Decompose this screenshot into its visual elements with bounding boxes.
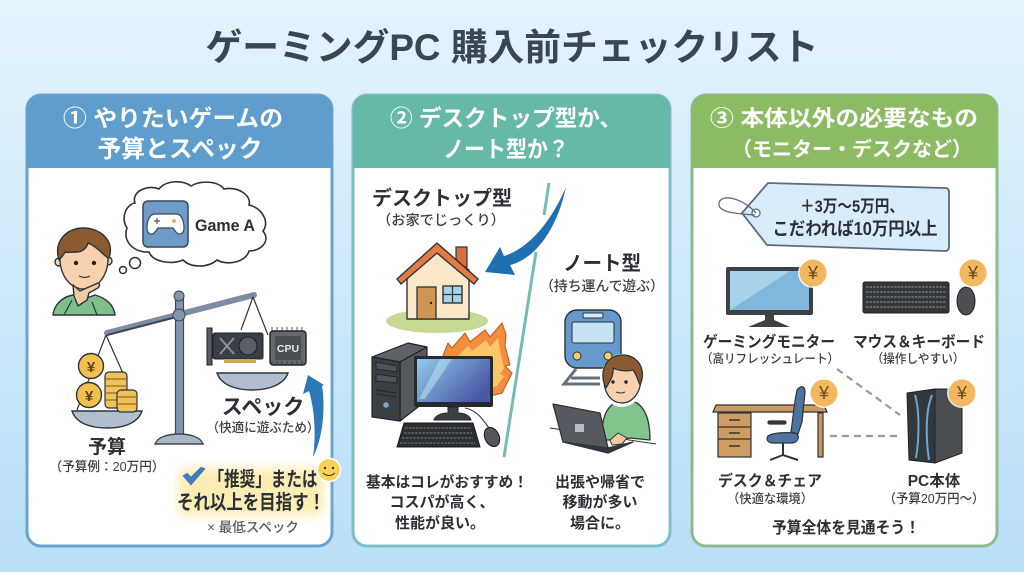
panel: desktop or laptop — [353, 95, 670, 546]
icon: person with laptop — [550, 355, 656, 453]
item: desk and chair: （快適な環境） — [727, 491, 813, 506]
budget label: 予算 — [88, 435, 126, 458]
item: desk and chair: デスク＆チェア — [718, 471, 822, 490]
desktop description: 性能が良い。 — [395, 514, 485, 532]
panel 3 heading — [710, 106, 978, 161]
icon: thinking person — [53, 228, 115, 315]
arrow: to house — [485, 187, 566, 275]
callout: aim for recommended: 「推奨」または — [208, 468, 318, 491]
panel: other necessities — [692, 95, 997, 546]
callout: aim for recommended: それ以上を目指す！ — [177, 491, 325, 514]
panel 3 heading: ③ 本体以外の必要なもの — [710, 106, 978, 131]
panel 2 heading — [390, 105, 622, 162]
item: gaming monitor: （高リフレッシュレート） — [701, 351, 839, 366]
thought bubble: Game A — [120, 182, 266, 274]
icon: check mark — [184, 468, 204, 484]
price tag: こだわれば10万円以上 — [772, 219, 938, 239]
panel 2 heading: ノート型か？ — [443, 136, 569, 162]
callout: aim for recommended: × 最低スペック — [207, 520, 299, 535]
panel: budget and spec — [27, 95, 340, 546]
price tag — [719, 183, 949, 251]
icon: smiley — [318, 458, 340, 482]
left pan with coins: ¥ — [87, 359, 96, 376]
spec label: （快適に遊ぶため） — [206, 420, 320, 435]
budget label: （予算例：20万円） — [50, 459, 164, 474]
item: gaming monitor: ゲーミングモニター — [703, 332, 835, 351]
thought bubble: Game A: Game A — [195, 217, 255, 235]
panel 1 heading — [63, 105, 283, 163]
laptop heading: ノート型 — [563, 252, 641, 275]
laptop heading — [540, 252, 664, 294]
budget label — [50, 435, 164, 474]
item: PC tower — [884, 378, 984, 506]
laptop heading: （持ち運んで遊ぶ） — [540, 278, 664, 294]
item: PC tower: PC本体 — [908, 472, 961, 490]
desktop description: コスパが高く、 — [389, 493, 495, 511]
desktop description: 基本はコレがおすすめ！ — [366, 473, 528, 491]
item: mouse and keyboard: （操作しやすい） — [872, 351, 964, 366]
icon: desktop PC — [372, 343, 503, 449]
desktop heading: （お家でじっくり） — [377, 212, 505, 228]
item: mouse and keyboard — [853, 258, 988, 366]
desktop heading — [372, 186, 512, 228]
icon: flames — [440, 323, 512, 396]
icon: train — [564, 310, 621, 384]
right pan with GPU and CPU: CPU — [277, 343, 299, 355]
item: mouse and keyboard: マウス＆キーボード — [853, 333, 985, 351]
icon: house — [386, 243, 488, 333]
item: desk and chair — [713, 378, 839, 506]
laptop description: 出張や帰省で — [555, 473, 645, 491]
laptop description: 移動が多い — [562, 493, 638, 511]
item: PC tower: （予算20万円～） — [884, 491, 984, 506]
desktop heading: デスクトップ型 — [372, 186, 512, 210]
panel 1 heading: 予算とスペック — [98, 136, 262, 163]
panel 1 heading: ① やりたいゲームの — [63, 105, 283, 131]
left pan with coins — [72, 354, 142, 428]
item: gaming monitor — [701, 258, 839, 366]
spec label: スペック — [222, 396, 304, 419]
callout: aim for recommended — [177, 468, 325, 535]
spec label — [206, 396, 320, 435]
budget overview note: 予算全体を見通そう！ — [772, 518, 920, 537]
title: ゲーミングPC 購入前チェックリスト — [206, 27, 818, 68]
laptop description: 場合に。 — [570, 515, 630, 532]
panel 3 heading: （モニター・デスクなど） — [732, 137, 972, 161]
desktop description — [366, 473, 528, 532]
left pan with coins: ¥ — [85, 388, 94, 405]
laptop description — [555, 473, 645, 532]
chart: balance scale — [72, 291, 306, 444]
panel 2 heading: ② デスクトップ型か、 — [390, 105, 622, 131]
right pan with GPU and CPU — [207, 327, 306, 390]
arrow: up to spec — [303, 375, 324, 457]
price tag: ＋3万～5万円、 — [800, 197, 904, 216]
